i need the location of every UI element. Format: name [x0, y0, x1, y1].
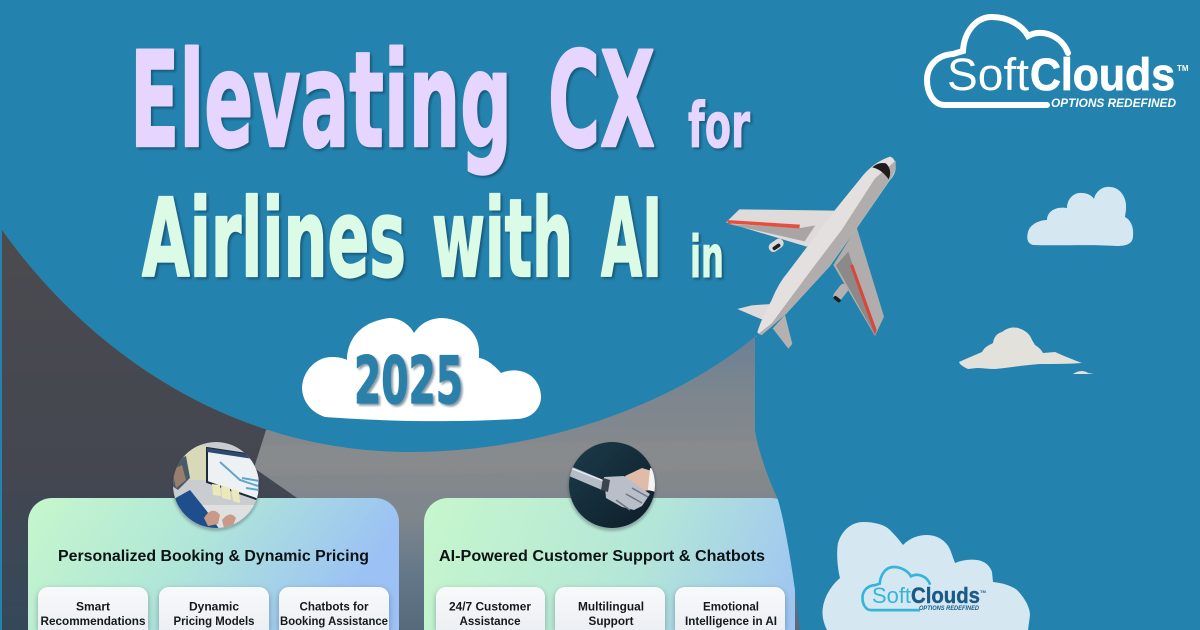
- background photo: airplane wing and sky: [0, 220, 810, 630]
- card: chatbots for booking assistance: Chatbots for: [300, 600, 369, 614]
- card: chatbots for booking assistance: [279, 587, 389, 630]
- card: 24/7 customer assistance: Assistance: [460, 614, 521, 628]
- logo: SoftClouds top right: Clouds: [1030, 49, 1175, 100]
- logo: SoftClouds small: [862, 567, 986, 612]
- year badge: cloud with 2025: [302, 318, 541, 421]
- card: smart recommendations: Recommendations: [40, 614, 146, 628]
- engine left: [767, 237, 785, 254]
- left wing: [726, 209, 845, 247]
- engine right: [831, 282, 851, 303]
- logo wordmark: Soft: [947, 49, 1030, 100]
- card: 24/7 customer assistance: 24/7 Customer: [449, 600, 531, 614]
- cloud: lower right with logo: [822, 522, 1030, 630]
- right wing: [833, 227, 884, 336]
- title word: in: in: [690, 223, 724, 291]
- logo: SoftClouds top right: OPTIONS REDEFINED: [1051, 96, 1176, 110]
- cloud: small cream cloud: [959, 327, 1094, 374]
- panel: personalized booking: [28, 498, 399, 630]
- tail fins: [737, 304, 782, 319]
- fuselage: [757, 157, 896, 335]
- illustration: airplane: [726, 157, 896, 349]
- card: multilingual support: Support: [588, 614, 634, 628]
- title line 2: AI: [601, 177, 662, 302]
- cockpit window: [872, 163, 890, 179]
- card: dynamic pricing models: Dynamic: [189, 600, 239, 614]
- logo: SoftClouds top right: [927, 17, 1189, 110]
- panel: AI customer support: [424, 498, 795, 630]
- logo: SoftClouds small: Clouds: [911, 583, 980, 608]
- card: dynamic pricing models: [159, 587, 269, 630]
- icon: person at monitor photo: [170, 440, 262, 535]
- logo: SoftClouds small: OPTIONS REDEFINED: [919, 606, 980, 612]
- year text: 2025: [354, 344, 463, 419]
- logo: SoftClouds top right: TM: [1177, 64, 1189, 73]
- card: emotional intelligence in AI: Emotional: [703, 600, 759, 614]
- title line 1: Elevating: [130, 24, 512, 178]
- card: dynamic pricing models: Pricing Models: [174, 614, 255, 628]
- cloud: upper right: [1027, 187, 1133, 246]
- card: chatbots for booking assistance: Booking Assistance: [280, 614, 388, 628]
- heading: personalized booking: Personalized Booking & Dynamic Pricing: [58, 548, 369, 565]
- logo: SoftClouds small: TM: [980, 589, 986, 594]
- icon: robot handshake photo: [566, 440, 658, 532]
- title line 2: Airlines: [142, 177, 406, 302]
- card: emotional intelligence in AI: Intelligence in AI: [685, 614, 777, 628]
- card: multilingual support: [555, 587, 665, 630]
- card: smart recommendations: Smart: [76, 600, 110, 614]
- card: emotional intelligence in AI: [675, 587, 785, 630]
- heading: AI customer support: AI-Powered Customer Support & Chatbots: [439, 548, 765, 565]
- card: smart recommendations: [38, 587, 148, 630]
- logo: SoftClouds small: Soft: [872, 583, 911, 608]
- title line 1: CX: [548, 24, 655, 178]
- sky overlay over right edge of photo: [755, 337, 810, 630]
- title line 2: with: [432, 177, 573, 302]
- card: 24/7 customer assistance: [436, 587, 545, 630]
- title word: for: for: [688, 89, 750, 162]
- card: multilingual support: Multilingual: [578, 600, 644, 614]
